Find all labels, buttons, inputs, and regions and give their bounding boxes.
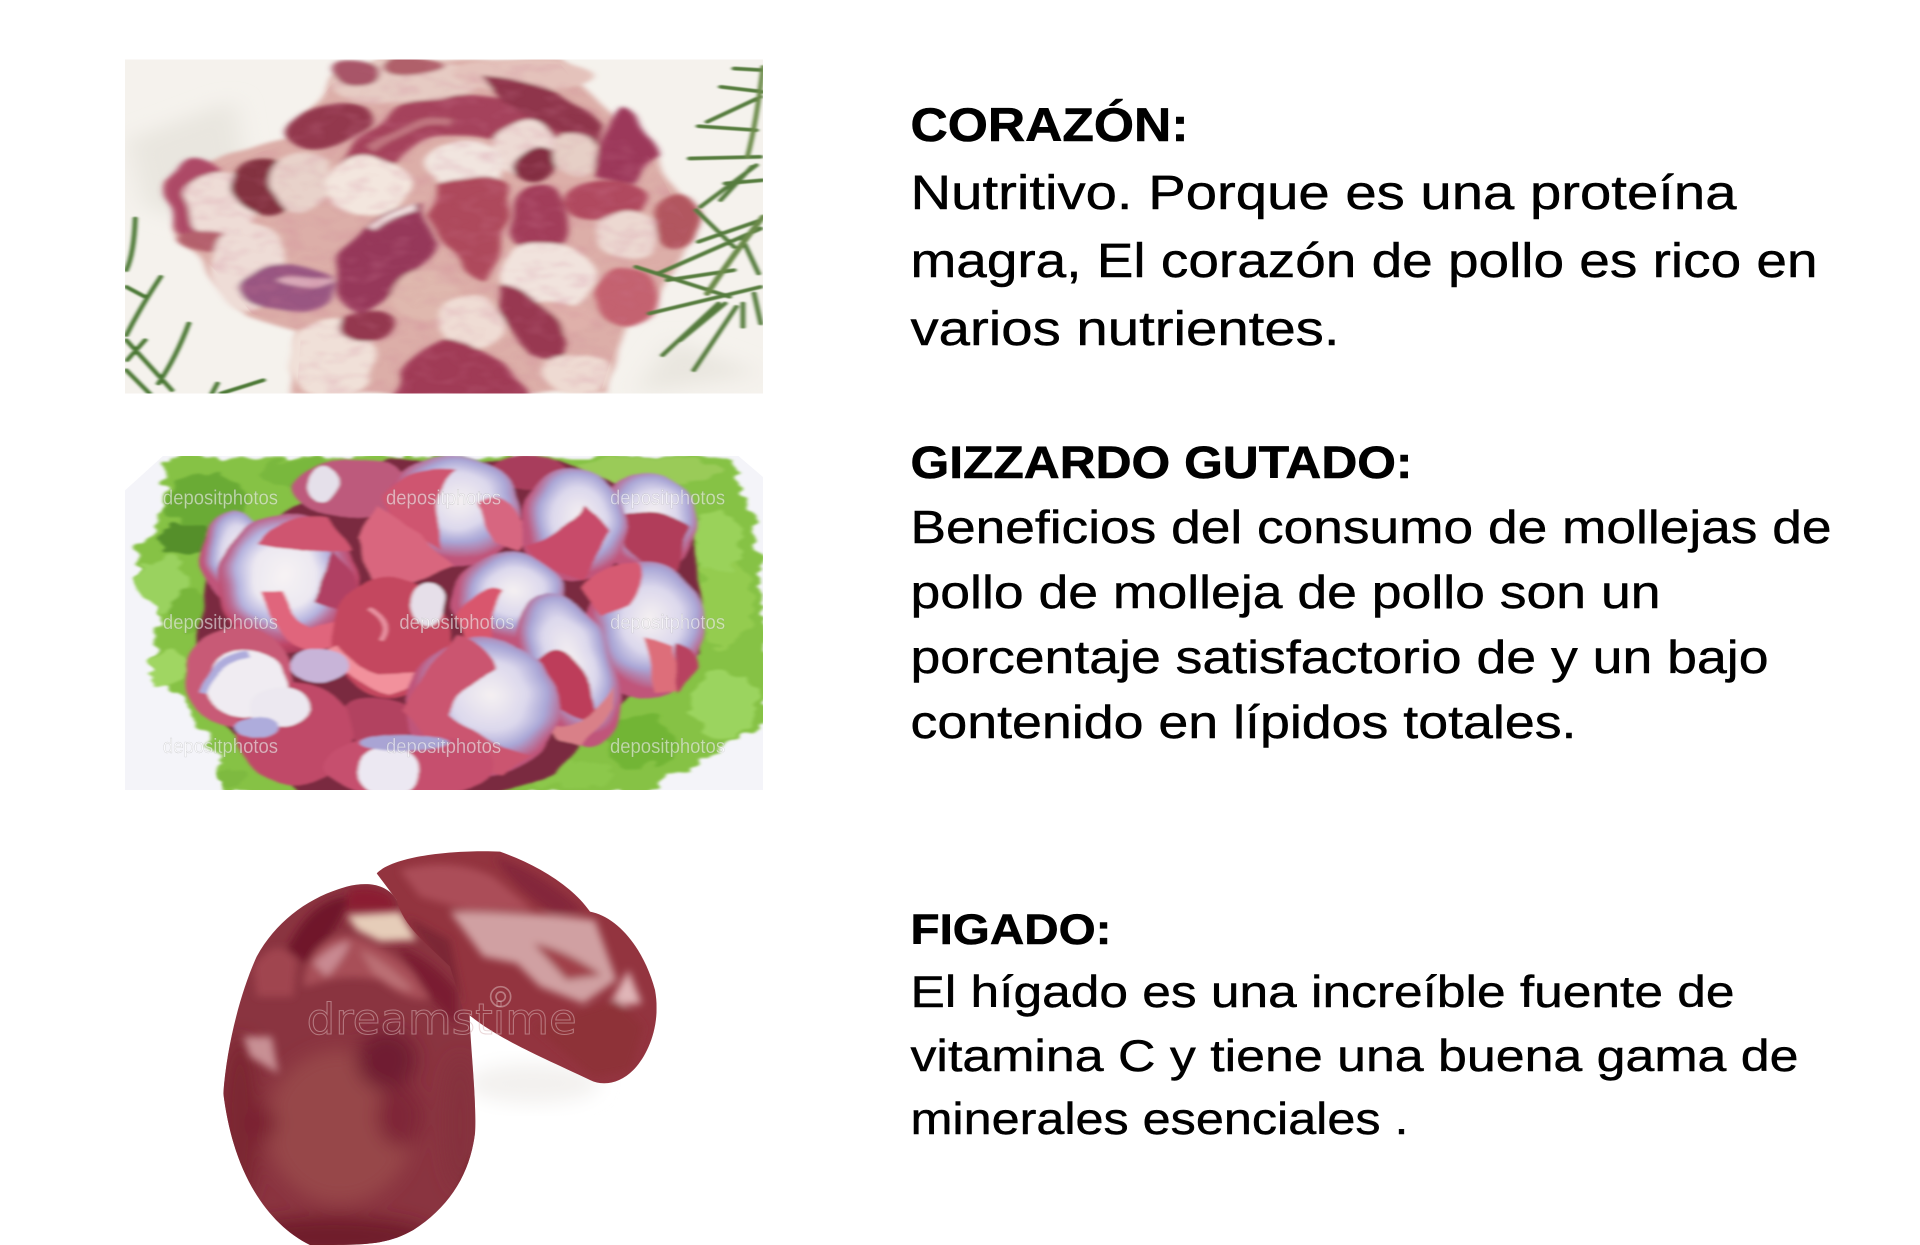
watermark text: depositphotos (386, 736, 501, 758)
watermark text: depositphotos (399, 612, 514, 634)
fat base of the pile (167, 60, 698, 394)
body: gizzardo gutado: porcentaje satisfactorio de y un bajo (910, 631, 1768, 683)
watermark text: depositphotos (163, 487, 278, 509)
watermark text: depositphotos (163, 736, 278, 758)
flesh mottling (181, 64, 689, 394)
photo: chicken liver (223, 851, 657, 1245)
text block: corazón (910, 98, 1818, 356)
text block: figado (910, 906, 1798, 1144)
left lobe shading (220, 1030, 477, 1245)
soft shadow under liver (467, 1063, 600, 1103)
top plate corners (125, 456, 763, 490)
body: figado: vitamina C y tiene una buena gama de (910, 1032, 1798, 1081)
photo: chicken hearts (125, 60, 763, 394)
watermark text: depositphotos (163, 612, 278, 634)
photo: gizzards on lettuce (125, 456, 763, 790)
body: figado: El hígado es una increíble fuente de (910, 968, 1734, 1017)
body: corazón (910, 167, 1818, 356)
heart pieces (166, 58, 700, 398)
body: corazón: Nutritivo. Porque es una proteína (910, 167, 1737, 220)
heading: gizzardo gutado: GIZZARDO GUTADO: (910, 437, 1412, 488)
body: gizzardo gutado (910, 501, 1832, 748)
body: corazón: magra, El corazón de pollo es rico en (910, 235, 1818, 288)
watermark text (163, 487, 725, 758)
left lobe (223, 884, 476, 1245)
dark base between gizzards (190, 460, 703, 794)
body: gizzardo gutado: contenido en lípidos totales. (910, 696, 1576, 748)
heading: corazón: CORAZÓN: (910, 98, 1188, 151)
heading: figado: FIGADO: (910, 906, 1112, 954)
lettuce bed (136, 457, 770, 794)
body: gizzardo gutado: pollo de molleja de pollo son un (910, 566, 1660, 618)
watermark logo and text: dreamstime (307, 995, 577, 1045)
rosemary sprigs (126, 67, 763, 393)
gizzard pieces (184, 454, 704, 797)
text block: gizzardo gutado (910, 437, 1832, 748)
body: figado (910, 968, 1798, 1144)
paper shading (127, 100, 761, 394)
watermark text: depositphotos (386, 487, 501, 509)
body: gizzardo gutado: Beneficios del consumo de mollejas de (910, 501, 1832, 553)
right lobe (376, 851, 657, 1084)
body: figado: minerales esenciales . (910, 1095, 1408, 1144)
body: corazón: varios nutrientes. (910, 303, 1340, 356)
